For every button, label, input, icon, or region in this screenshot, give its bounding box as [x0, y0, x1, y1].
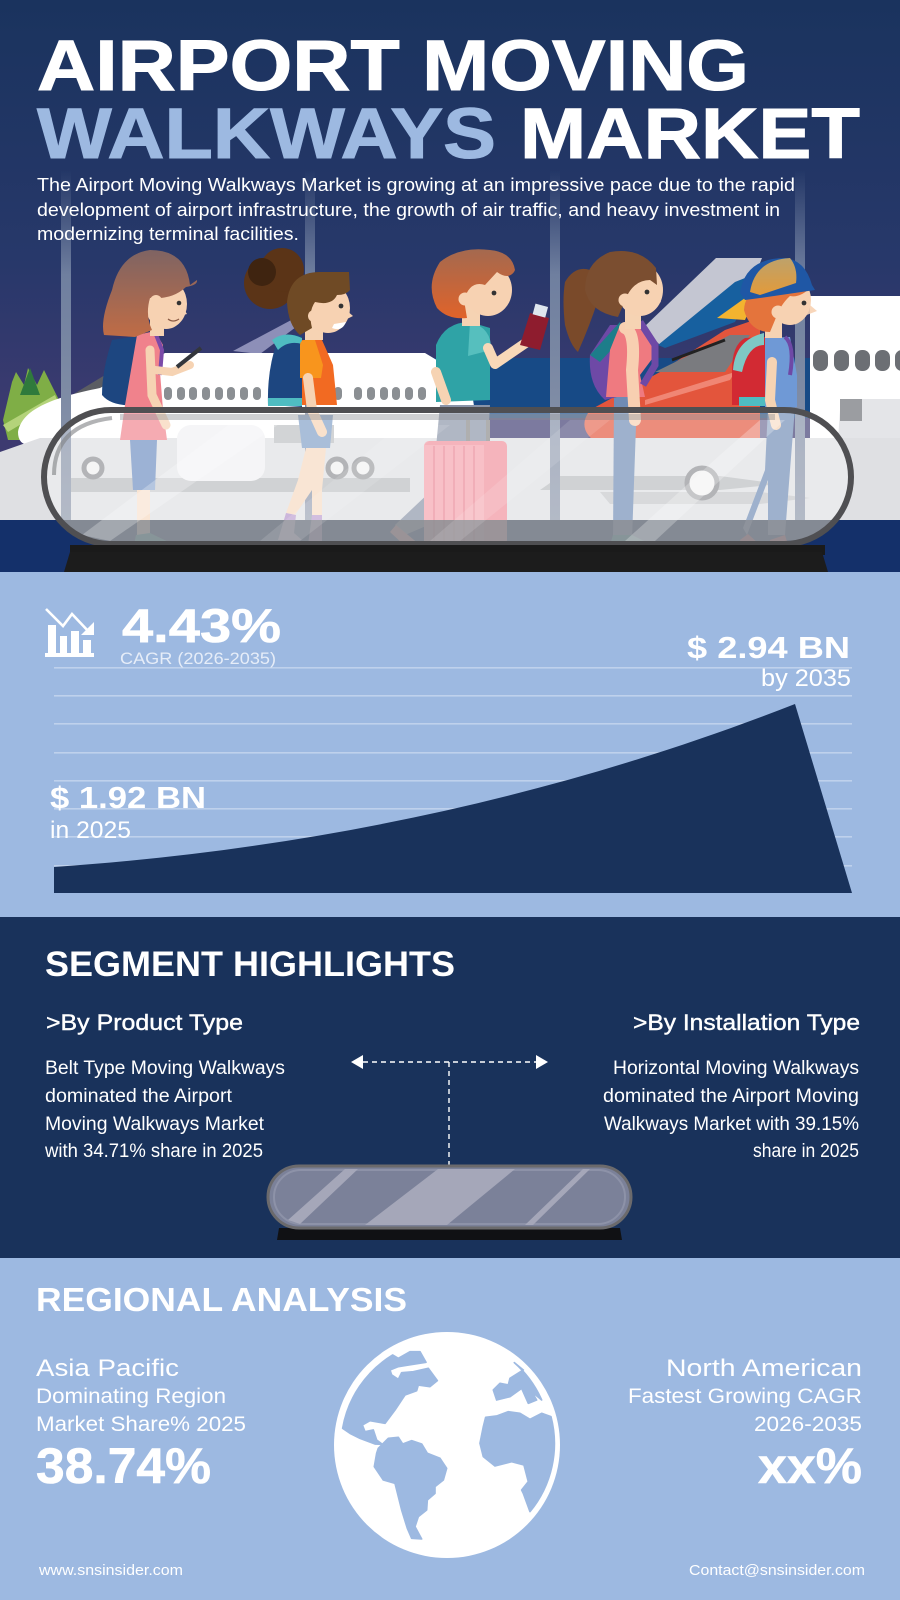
2025 value: $ 1.92 BN	[50, 780, 206, 815]
installation type text: dominated the Airport Moving	[603, 1086, 859, 1107]
right airplane	[810, 296, 900, 480]
engine of left airplane	[177, 425, 334, 481]
panel: regional analysis	[0, 1258, 900, 1600]
2035 label: by 2035	[761, 665, 851, 692]
ground shadow bands	[70, 476, 810, 504]
icon: declining bar chart	[45, 609, 94, 657]
traveller 4: girl with ponytail	[564, 251, 663, 545]
hero sky background	[0, 0, 900, 572]
panel: segment highlights	[0, 917, 900, 1258]
installation type heading: >By Installation Type	[633, 1010, 860, 1035]
installation type text: Walkways Market with 39.15%	[604, 1114, 859, 1135]
traveller 2: girl in orange	[244, 248, 353, 545]
trees	[3, 368, 58, 440]
glass reflections	[82, 420, 785, 541]
Asia Pacific block: Asia Pacific	[36, 1355, 179, 1382]
intro paragraph: modernizing terminal facilities.	[37, 223, 299, 244]
traveller 1: girl with phone	[102, 250, 201, 545]
chart grid lines	[54, 667, 852, 867]
intro paragraph	[37, 174, 795, 244]
North American block	[628, 1355, 862, 1494]
apron ground	[0, 438, 900, 520]
panel background	[0, 917, 900, 1258]
icon: globe	[334, 1332, 560, 1558]
installation type text	[603, 1058, 859, 1162]
North American block: xx%	[758, 1438, 862, 1494]
intro paragraph: development of airport infrastructure, the growth of air traffic, and heavy investment in	[37, 199, 780, 220]
rolling suitcase	[424, 420, 507, 545]
North American block: North American	[666, 1355, 862, 1382]
window pillars	[61, 170, 805, 520]
2035 value: $ 2.94 BN	[687, 630, 850, 665]
panel: market growth	[0, 572, 900, 917]
panel background	[0, 1258, 900, 1600]
installation type text: share in 2025	[753, 1141, 859, 1162]
traveller 5: boy with cap	[732, 258, 817, 545]
footer contact: Contact@snsinsider.com	[689, 1562, 865, 1579]
traveller 3: boy with passport	[390, 249, 549, 545]
footer website: www.snsinsider.com	[38, 1562, 183, 1579]
heading: SEGMENT HIGHLIGHTS	[45, 945, 455, 984]
walkway black base	[64, 545, 828, 572]
CAGR figure: 4.43%	[122, 599, 281, 652]
Asia Pacific block: Dominating Region	[36, 1385, 226, 1408]
landing gear wheels	[84, 459, 717, 498]
North American block: 2026-2035	[754, 1413, 862, 1436]
arrow: split dashed connector	[351, 1055, 548, 1167]
product type text	[44, 1058, 285, 1162]
product type text: dominated the Airport	[45, 1086, 233, 1107]
walkway floor band	[60, 520, 836, 541]
moving walkway glass tube	[44, 410, 851, 544]
panel background	[0, 572, 900, 917]
tarmac strip	[0, 520, 900, 572]
walkway frame	[44, 410, 851, 544]
icon: small walkway	[268, 1166, 631, 1240]
area chart	[54, 704, 852, 893]
Asia Pacific block: 38.74%	[36, 1438, 211, 1494]
product type text: Belt Type Moving Walkways	[45, 1058, 285, 1079]
North American block: Fastest Growing CAGR	[628, 1385, 862, 1408]
installation type text: Horizontal Moving Walkways	[613, 1058, 859, 1079]
Asia Pacific block	[36, 1355, 246, 1494]
product type text: with 34.71% share in 2025	[44, 1141, 263, 1162]
intro paragraph: The Airport Moving Walkways Market is growing at an impressive pace due to the rapid	[37, 174, 795, 195]
main title: AIRPORT MOVING	[37, 27, 749, 106]
2025 label: in 2025	[50, 817, 131, 844]
hero panel	[0, 0, 900, 572]
left airplane	[18, 318, 480, 445]
product type heading: >By Product Type	[46, 1010, 243, 1035]
tail of red airplane	[584, 258, 762, 460]
main title: MARKET	[520, 95, 860, 174]
main title: WALKWAYS	[37, 95, 496, 174]
CAGR label: CAGR (2026-2035)	[120, 649, 276, 668]
heading: REGIONAL ANALYSIS	[36, 1281, 407, 1318]
product type text: Moving Walkways Market	[45, 1114, 265, 1135]
main title	[37, 27, 860, 174]
distant sea band	[430, 358, 830, 418]
Asia Pacific block: Market Share% 2025	[36, 1413, 246, 1436]
